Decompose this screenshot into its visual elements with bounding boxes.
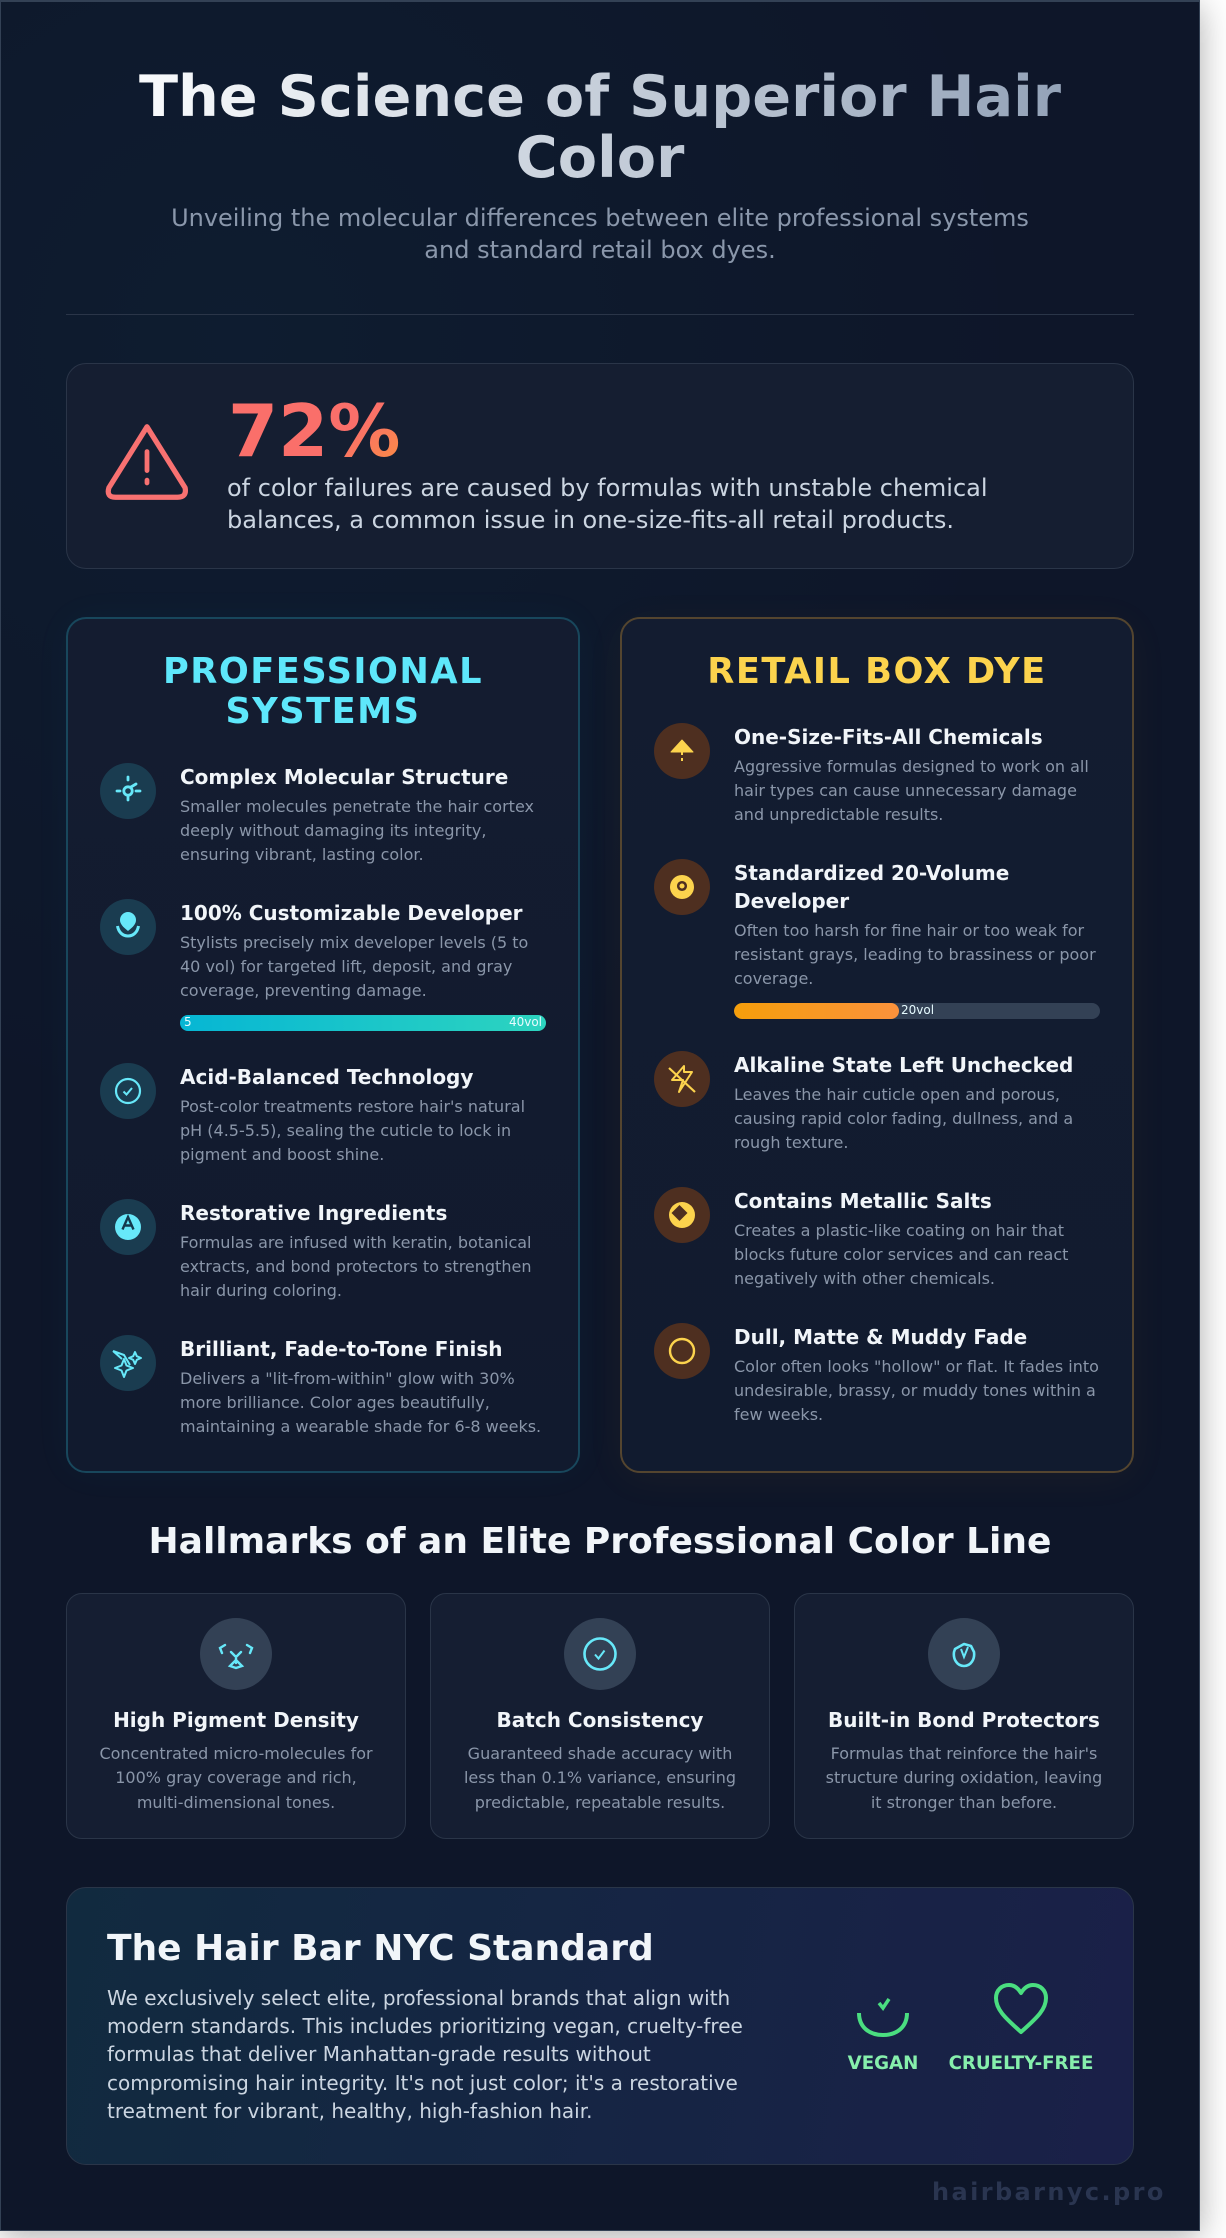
developer range bar: 5 to 40 vol <box>180 1015 546 1031</box>
icon: target disc <box>654 859 710 915</box>
item title: Developer <box>734 889 849 913</box>
heading: retail box dye: RETAIL BOX DYE <box>707 651 1047 692</box>
item description: hair during coloring. <box>180 1281 342 1300</box>
item title: Complex Molecular Structure <box>180 765 508 789</box>
card description: less than 0.1% variance, ensuring <box>464 1768 736 1787</box>
card: high pigment density <box>66 1593 406 1839</box>
item description: extracts, and bond protectors to strengthen <box>180 1257 531 1276</box>
item title: Acid-Balanced Technology <box>180 1065 473 1089</box>
icon: diamond disc <box>654 1187 710 1243</box>
icon: check circle <box>564 1618 636 1690</box>
developer range bar: 5 to 40 vol: 5 <box>184 1015 192 1029</box>
footer text: formulas that deliver Manhattan-grade results without <box>107 2042 651 2066</box>
subtitle <box>171 204 1029 264</box>
footer text: modern standards. This includes prioritizing vegan, cruelty-free <box>107 2014 743 2038</box>
section heading: hallmarks: Hallmarks of an Elite Professional Color Line <box>149 1521 1051 1562</box>
item description <box>734 921 1096 988</box>
card description: Formulas that reinforce the hair's <box>831 1744 1097 1763</box>
item description: more brilliance. Color ages beautifully, <box>180 1393 490 1412</box>
subtitle: and standard retail box dyes. <box>424 236 776 264</box>
footer text: compromising hair integrity. It's not just color; it's a restorative <box>107 2071 738 2095</box>
heading: professional systems: SYSTEMS <box>225 691 421 732</box>
item description: Creates a plastic-like coating on hair that <box>734 1221 1064 1240</box>
badge label: CRUELTY-FREE <box>949 2053 1093 2074</box>
item description: negatively with other chemicals. <box>734 1269 995 1288</box>
watermark: hairbarnyc.pro <box>932 2178 1166 2206</box>
badge: vegan <box>848 1998 918 2074</box>
item description: causing rapid color fading, dullness, and a <box>734 1109 1073 1128</box>
item description <box>180 797 534 864</box>
developer bar: fixed 20 vol <box>734 1003 1100 1019</box>
item description: Aggressive formulas designed to work on all <box>734 757 1089 776</box>
card title: Built-in Bond Protectors <box>828 1708 1100 1732</box>
item description: Smaller molecules penetrate the hair cortex <box>180 797 534 816</box>
card title: High Pigment Density <box>113 1708 359 1732</box>
item description: Color often looks "hollow" or flat. It fades into <box>734 1357 1099 1376</box>
title: The Science of Superior Hair <box>139 63 1061 130</box>
badge label: VEGAN <box>848 2053 918 2074</box>
item: brilliant fade-to-tone finish <box>100 1335 541 1436</box>
footer text: We exclusively select elite, professional brands that align with <box>107 1986 730 2010</box>
item: standardized 20-volume developer <box>654 859 1100 1019</box>
badge: cruelty-free <box>949 1983 1093 2074</box>
card description <box>464 1744 736 1812</box>
heading: professional systems <box>163 651 483 732</box>
item title: Contains Metallic Salts <box>734 1189 992 1213</box>
card description: structure during oxidation, leaving <box>826 1768 1102 1787</box>
item description: coverage, preventing damage. <box>180 981 427 1000</box>
item description <box>180 1097 525 1164</box>
item description: few weeks. <box>734 1405 823 1424</box>
icon: vegan leaf smile <box>857 1998 909 2037</box>
item description: Stylists precisely mix developer levels (5 to <box>180 933 528 952</box>
icon: crossed lightning <box>654 1051 710 1107</box>
item description: Post-color treatments restore hair's natural <box>180 1097 525 1116</box>
item: contains metallic salts <box>654 1187 1068 1288</box>
item description <box>734 1357 1099 1424</box>
developer range bar: 5 to 40 vol: 40vol <box>509 1015 542 1029</box>
panel: key statistic <box>66 363 1134 569</box>
item description: hair types can cause unnecessary damage <box>734 781 1077 800</box>
icon: hazard arrow <box>654 723 710 779</box>
statistic description: balances, a common issue in one-size-fits-all retail products. <box>227 506 954 534</box>
statistic number: 72% <box>228 389 400 473</box>
item: customizable developer <box>100 899 546 1031</box>
subtitle: Unveiling the molecular differences between elite professional systems <box>171 204 1029 232</box>
item description: and unpredictable results. <box>734 805 943 824</box>
icon: check circle <box>100 1063 156 1119</box>
icon: pigment molecules <box>200 1618 272 1690</box>
item description: 40 vol) for targeted lift, deposit, and gray <box>180 957 512 976</box>
item: acid-balanced technology <box>100 1063 525 1164</box>
item description <box>180 1233 532 1300</box>
icon: droplet <box>100 899 156 955</box>
item description: pH (4.5-5.5), sealing the cuticle to lock in <box>180 1121 511 1140</box>
item description: resistant grays, leading to brassiness or poor <box>734 945 1096 964</box>
item description: undesirable, brassy, or muddy tones within a <box>734 1381 1096 1400</box>
card description: Guaranteed shade accuracy with <box>468 1744 732 1763</box>
heading: professional systems: PROFESSIONAL <box>163 651 483 692</box>
panel: the hair bar nyc standard <box>66 1887 1134 2165</box>
item description: Leaves the hair cuticle open and porous, <box>734 1085 1060 1104</box>
item description <box>180 1369 541 1436</box>
icon: molecule <box>100 763 156 819</box>
icon: hollow ring <box>654 1323 710 1379</box>
card description: it stronger than before. <box>871 1793 1057 1812</box>
icon: heart outline <box>994 1983 1048 2034</box>
item description: Often too harsh for fine hair or too weak for <box>734 921 1084 940</box>
item description <box>734 1085 1073 1152</box>
item title: Alkaline State Left Unchecked <box>734 1053 1073 1077</box>
card description: multi-dimensional tones. <box>137 1793 335 1812</box>
item title: Brilliant, Fade-to-Tone Finish <box>180 1337 502 1361</box>
card description: 100% gray coverage and rich, <box>115 1768 357 1787</box>
item title: 100% Customizable Developer <box>180 901 523 925</box>
item: alkaline state left unchecked <box>654 1051 1073 1152</box>
card: built-in bond protectors <box>794 1593 1134 1839</box>
item description: deeply without damaging its integrity, <box>180 821 486 840</box>
item: complex molecular structure <box>100 763 534 864</box>
card description: Concentrated micro-molecules for <box>99 1744 373 1763</box>
item title <box>734 861 1009 913</box>
card: batch consistency <box>430 1593 770 1839</box>
item description: blocks future color services and can react <box>734 1245 1068 1264</box>
card description: predictable, repeatable results. <box>475 1793 725 1812</box>
icon: bond shield <box>928 1618 1000 1690</box>
footer heading: The Hair Bar NYC Standard <box>107 1928 654 1969</box>
title <box>139 63 1061 191</box>
item description <box>180 933 528 1000</box>
item title: One-Size-Fits-All Chemicals <box>734 725 1043 749</box>
item description: pigment and boost shine. <box>180 1145 384 1164</box>
card description <box>99 1744 373 1812</box>
developer bar: fixed 20 vol: 20vol <box>901 1003 934 1017</box>
item description: maintaining a wearable shade for 6-8 weeks. <box>180 1417 541 1436</box>
panel: professional systems <box>66 617 580 1473</box>
title: Color <box>516 124 684 191</box>
item: one-size-fits-all chemicals <box>654 723 1089 824</box>
item title: Restorative Ingredients <box>180 1201 447 1225</box>
item: dull, matte and muddy fade <box>654 1323 1099 1424</box>
footer text <box>107 1986 743 2123</box>
card description <box>826 1744 1102 1812</box>
item description: coverage. <box>734 969 813 988</box>
item title: Dull, Matte & Muddy Fade <box>734 1325 1027 1349</box>
item description: ensuring vibrant, lasting color. <box>180 845 424 864</box>
icon: warning triangle <box>106 424 188 500</box>
item description <box>734 757 1089 824</box>
item description: Formulas are infused with keratin, botanical <box>180 1233 532 1252</box>
statistic description <box>227 474 988 534</box>
card title: Batch Consistency <box>497 1708 703 1732</box>
item description: rough texture. <box>734 1133 848 1152</box>
icon: filled badge <box>100 1199 156 1255</box>
statistic description: of color failures are caused by formulas with unstable chemical <box>227 474 988 502</box>
item: restorative ingredients <box>100 1199 532 1300</box>
footer text: treatment for vibrant, healthy, high-fashion hair. <box>107 2099 592 2123</box>
panel: retail box dye <box>620 617 1134 1473</box>
item description: Delivers a "lit-from-within" glow with 30% <box>180 1369 515 1388</box>
item description <box>734 1221 1068 1288</box>
item title: Standardized 20-Volume <box>734 861 1009 885</box>
icon: sparkles <box>100 1335 156 1391</box>
